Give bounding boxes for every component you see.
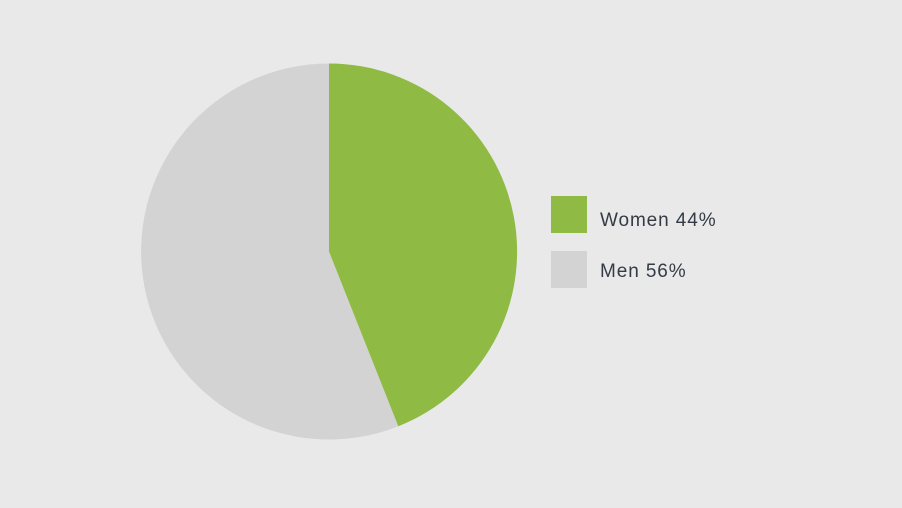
slice: women 44% xyxy=(329,63,517,426)
slice: men 56% xyxy=(141,64,398,439)
legend item: men: Men 56% xyxy=(600,261,687,282)
legend item: women: Women 44% xyxy=(600,210,717,231)
legend xyxy=(551,196,717,288)
legend item: men xyxy=(551,251,687,288)
legend item: women xyxy=(551,196,717,233)
